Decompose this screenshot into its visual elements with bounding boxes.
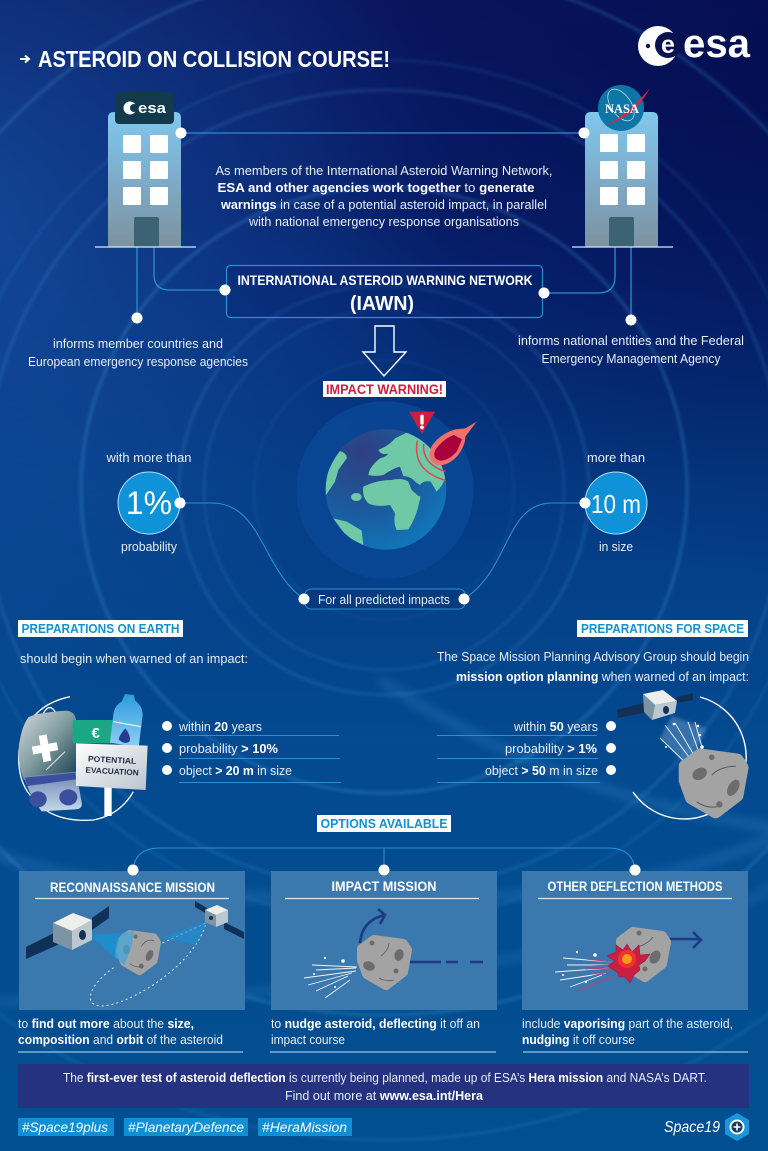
text: space preparations intro (437, 649, 749, 684)
stat: 10 m in size: more than (587, 450, 645, 465)
panel: impact mission (271, 871, 497, 1010)
label: preparations for space: PREPARATIONS FOR SPACE (581, 621, 744, 636)
connector lines: agencies and IAWN (137, 133, 631, 320)
pill: for all predicted impacts: For all predicted impacts (318, 592, 450, 607)
text: space preparations intro: mission option planning when warned of an impact: (456, 669, 749, 684)
intro text: with national emergency response organisations (248, 214, 519, 229)
option nodes (128, 864, 640, 876)
arrow: down (363, 326, 406, 376)
text: deflection description (522, 1016, 733, 1047)
list: earth preparation thresholds: within 20 years (178, 719, 262, 734)
text: reconnaissance description: to find out more about the size, (18, 1016, 194, 1031)
panel: reconnaissance mission (19, 871, 245, 1010)
panel: other deflection methods: OTHER DEFLECTION METHODS (548, 879, 722, 894)
text: impact description (271, 1016, 480, 1047)
intro text: ESA and other agencies work together to generate (218, 180, 534, 195)
illustration: spacecraft and asteroid (617, 690, 746, 819)
illustration: emergency kit (19, 694, 148, 820)
text: deflection description: nudging it off course (522, 1032, 635, 1047)
building: NASA: NASA (605, 102, 639, 116)
hashtags: #Space19plus (22, 1119, 108, 1135)
stat: 10 m in size (585, 450, 647, 554)
stat: 1% probability: probability (121, 539, 177, 554)
logo: esa: esa (683, 22, 751, 66)
callout: Hera mission: The first-ever test of asteroid deflection is currently being planned, made up of ESA’s Hera mission and NASA’s DART. (63, 1070, 707, 1085)
stat: 1% probability (106, 450, 192, 554)
text: NASA informs: Emergency Management Agency (542, 351, 721, 366)
hashtags (18, 1118, 352, 1136)
building: ESA: esa (138, 100, 167, 117)
pill: for all predicted impacts (174, 498, 590, 609)
list: space preparation thresholds: object > 50 m in size (485, 763, 598, 778)
stat: 1% probability: 1% (126, 485, 172, 521)
logo: esa: e (661, 31, 675, 59)
text: earth preparations intro: should begin when warned of an impact: (20, 651, 248, 666)
text: ESA informs: informs member countries and (53, 336, 223, 351)
illustration: emergency kit: € (92, 726, 100, 742)
panel: other deflection methods (522, 871, 748, 1010)
text: deflection description: include vaporising part of the asteroid, (522, 1016, 733, 1031)
text: impact description: impact course (271, 1032, 345, 1047)
illustration: emergency kit: EVACUATION (85, 766, 139, 777)
label: options available: OPTIONS AVAILABLE (320, 816, 448, 831)
IAWN box: INTERNATIONAL ASTEROID WARNING NETWORK (238, 272, 532, 288)
IAWN box: (IAWN) (350, 293, 414, 315)
illustration: emergency kit: POTENTIAL (88, 754, 137, 766)
logo: esa (638, 22, 751, 66)
text: reconnaissance description: composition and orbit of the asteroid (18, 1032, 223, 1047)
list: space preparation thresholds (437, 719, 616, 782)
text: ESA informs: European emergency response agencies (28, 354, 248, 369)
list: space preparation thresholds: within 50 years (513, 719, 598, 734)
stat: 10 m in size: 10 m (591, 489, 641, 519)
intro text (216, 163, 552, 229)
callout: Hera mission: Find out more at www.esa.int/Hera (285, 1088, 484, 1103)
illustration: earth and comet (296, 401, 477, 579)
stat: 10 m in size: in size (599, 539, 633, 554)
text: ESA informs (28, 336, 248, 369)
label: impact warning: IMPACT WARNING! (326, 382, 443, 397)
logo: Space19 (664, 1113, 749, 1141)
label: preparations on earth: PREPARATIONS ON EARTH (22, 621, 180, 636)
text: NASA informs (518, 333, 744, 366)
intro text: As members of the International Asteroid Warning Network, (216, 163, 552, 178)
title: ASTEROID ON COLLISION COURSE! (38, 46, 390, 72)
connector lines: options (133, 848, 635, 870)
connector curves: predicted impacts (180, 503, 585, 599)
panel underlines (18, 1051, 748, 1053)
hashtags: #PlanetaryDefence (128, 1119, 244, 1135)
panel: reconnaissance mission: RECONNAISSANCE MISSION (50, 880, 215, 895)
text: reconnaissance description (18, 1016, 223, 1047)
stat: 1% probability: with more than (106, 450, 192, 465)
connector nodes (132, 128, 636, 326)
text: impact description: to nudge asteroid, deflecting it off an (271, 1016, 480, 1031)
list: earth preparation thresholds (162, 719, 341, 782)
logo: Space19: Space19 (664, 1119, 720, 1136)
building: ESA (95, 92, 196, 247)
building: NASA (572, 85, 673, 247)
text: NASA informs: informs national entities and the Federal (518, 333, 744, 348)
intro text: warnings in case of a potential asteroid impact, in parallel (220, 197, 547, 212)
list: earth preparation thresholds: object > 20 m in size (179, 763, 292, 778)
list: earth preparation thresholds: probability > 10% (179, 741, 278, 756)
IAWN box (226, 266, 542, 318)
callout: Hera mission (18, 1064, 749, 1108)
list: space preparation thresholds: probability > 1% (505, 741, 597, 756)
hashtags: #HeraMission (262, 1119, 347, 1135)
panel: impact mission: IMPACT MISSION (332, 879, 436, 894)
text: space preparations intro: The Space Mission Planning Advisory Group should begin (437, 649, 749, 664)
